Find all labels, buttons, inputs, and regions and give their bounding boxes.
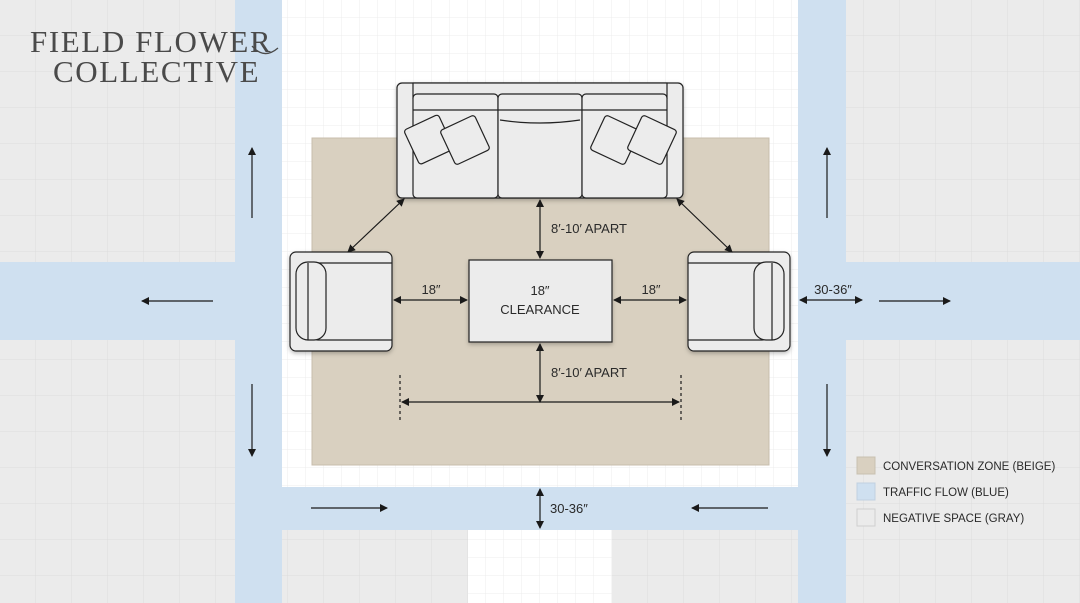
conversation zone rug xyxy=(312,138,769,465)
dimension labels: 30-36″ xyxy=(814,282,852,297)
legend: CONVERSATION ZONE (BEIGE) xyxy=(883,461,1055,473)
room floor xyxy=(282,0,798,603)
logo: COLLECTIVE xyxy=(53,54,260,89)
legend: TRAFFIC FLOW (BLUE) xyxy=(883,487,1009,499)
dimension labels: 18″ xyxy=(641,282,661,297)
sofa xyxy=(397,83,683,198)
logo xyxy=(30,24,278,89)
logo: FIELD FLOWER xyxy=(30,24,272,59)
right armchair xyxy=(688,252,790,351)
dimension labels xyxy=(421,221,852,516)
traffic flow arrows xyxy=(142,148,950,508)
coffee table xyxy=(469,260,612,342)
coffee table: CLEARANCE xyxy=(500,302,580,317)
dimension labels: 18″ xyxy=(421,282,441,297)
dimension labels: 8′-10′ APART xyxy=(551,365,627,380)
dimension labels: 30-36″ xyxy=(550,501,588,516)
left armchair xyxy=(290,252,392,351)
legend: NEGATIVE SPACE (GRAY) xyxy=(883,513,1024,525)
legend xyxy=(857,457,1055,526)
coffee table: 18″ xyxy=(530,283,550,298)
dimension arrows xyxy=(348,199,862,528)
dimension labels: 8′-10′ APART xyxy=(551,221,627,236)
